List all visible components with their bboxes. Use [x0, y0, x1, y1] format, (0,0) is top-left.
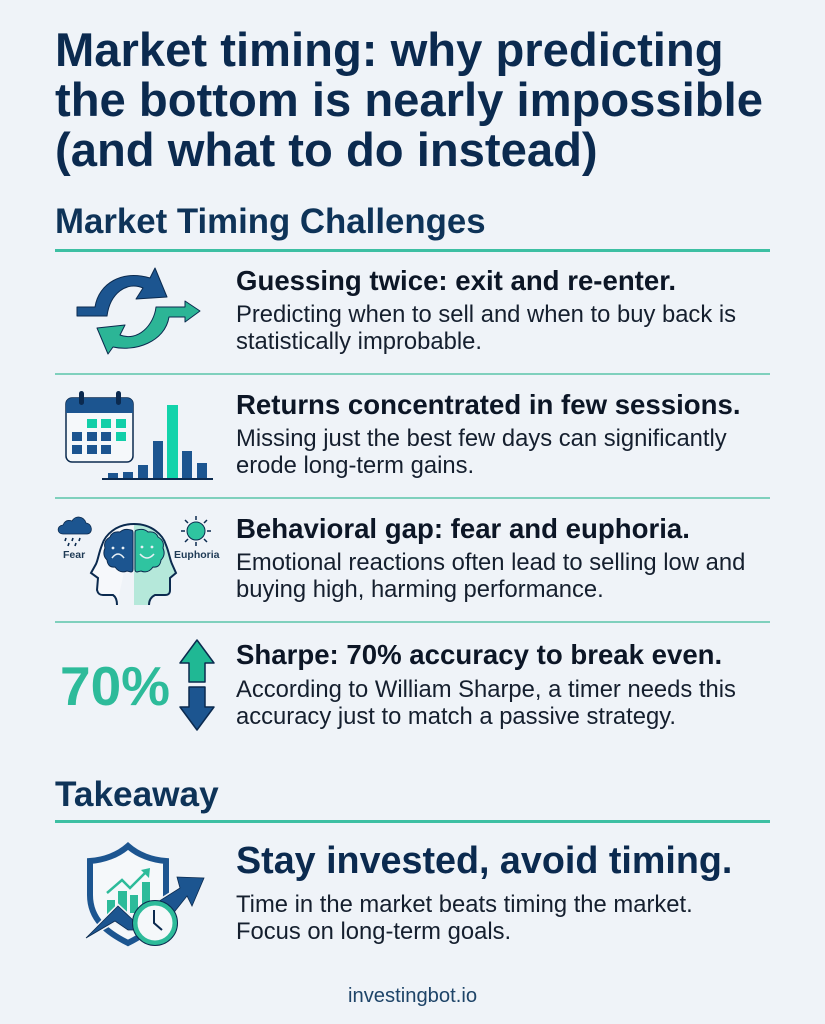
- title: the bottom is nearly impossible: [55, 74, 763, 127]
- row 4 heading: Sharpe: 70% accuracy to break even.: [236, 639, 722, 670]
- row 1 text: [236, 301, 736, 355]
- takeaway text: Focus on long-term goals.: [236, 918, 511, 945]
- title: [55, 24, 763, 177]
- row 3 text: [236, 549, 745, 603]
- row 4 text: accuracy just to match a passive strategy.: [236, 703, 676, 730]
- row 2 text: erode long-term gains.: [236, 452, 474, 479]
- stat: 70%: 70%: [60, 655, 170, 717]
- title: Market timing: why predicting: [55, 24, 724, 77]
- row 1 text: statistically improbable.: [236, 328, 482, 355]
- row 2 heading: Returns concentrated in few sessions.: [236, 389, 740, 420]
- title: (and what to do instead): [55, 124, 598, 177]
- footer: investingbot.io: [348, 985, 477, 1007]
- heading: market timing challenges: Market Timing Challenges: [55, 202, 486, 241]
- row 2 text: [236, 425, 727, 479]
- row 1 text: Predicting when to sell and when to buy back is: [236, 301, 736, 328]
- row 3 text: buying high, harming performance.: [236, 576, 604, 603]
- heading: takeaway: Takeaway: [55, 775, 219, 814]
- label: euphoria: Euphoria: [174, 549, 220, 561]
- row 3 heading: Behavioral gap: fear and euphoria.: [236, 513, 690, 544]
- row 4 text: According to William Sharpe, a timer needs this: [236, 676, 736, 703]
- takeaway text: [236, 891, 693, 945]
- row 2 text: Missing just the best few days can significantly: [236, 425, 727, 452]
- row 3 text: Emotional reactions often lead to selling low and: [236, 549, 745, 576]
- takeaway text: Time in the market beats timing the market.: [236, 891, 693, 918]
- takeaway heading: Stay invested, avoid timing.: [236, 839, 732, 881]
- label: fear: Fear: [63, 549, 85, 561]
- row 1 heading: Guessing twice: exit and re-enter.: [236, 265, 676, 296]
- row 4 text: [236, 676, 736, 730]
